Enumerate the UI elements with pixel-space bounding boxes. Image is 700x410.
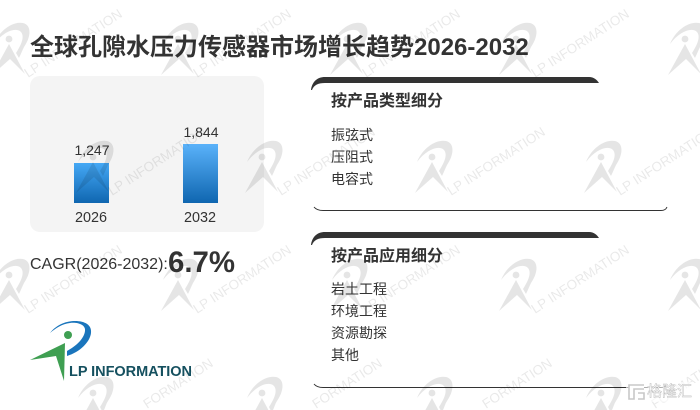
- watermark pattern: LP INFORMATION: [528, 6, 632, 81]
- logo: LP Information: LP INFORMATION: [69, 364, 192, 380]
- list: [331, 127, 373, 187]
- heading: 按产品应用细分: [331, 248, 443, 265]
- watermark pattern: LP INFORMATION: [105, 124, 209, 199]
- heading: 按产品类型细分: [331, 93, 443, 110]
- axis label 2026: 2026: [75, 210, 107, 226]
- list: 资源勘探: [331, 325, 387, 341]
- brand mark: Gelonghui: [626, 382, 694, 402]
- panel: by application: [311, 232, 666, 388]
- icon: G mark: [628, 384, 645, 400]
- watermark pattern: FORMATION: [140, 355, 216, 410]
- watermark pattern: LP INFORMATION: [21, 6, 125, 81]
- bar 2032: [183, 144, 218, 203]
- title: 全球孔隙水压力传感器市场增长趋势2026-2032: [30, 34, 529, 61]
- list: [331, 281, 387, 363]
- watermark pattern: LP INFORMATION: [359, 242, 463, 317]
- axis label 2032: 2032: [184, 210, 216, 226]
- panel frame: [311, 77, 668, 211]
- list: 环境工程: [331, 303, 387, 319]
- value 2026: 1,247: [74, 142, 110, 158]
- list: 压阻式: [331, 149, 373, 165]
- bar 2026: [74, 163, 109, 203]
- watermark pattern: LP INFORMATION: [190, 242, 294, 317]
- panel: market size bar chart: [30, 76, 264, 232]
- list: 其他: [331, 347, 359, 363]
- watermark pattern: LP INFORMATION: [21, 242, 125, 317]
- watermark pattern: LP INFORMATION: [444, 124, 548, 199]
- panel frame: [311, 232, 666, 388]
- watermark pattern: FORMATION: [309, 355, 385, 410]
- value 2032: 1,844: [183, 124, 219, 140]
- watermark pattern: FORMATION: [479, 355, 555, 410]
- list: 振弦式: [331, 127, 373, 143]
- watermark pattern: LP INFORMATION: [190, 6, 294, 81]
- CAGR label: CAGR(2026-2032):: [30, 256, 168, 273]
- CAGR value: 6.7%: [168, 246, 235, 279]
- list: 岩土工程: [331, 281, 387, 297]
- brand name: 格隆汇: [647, 383, 692, 400]
- watermark pattern: LP INFORMATION: [274, 124, 378, 199]
- watermark pattern: LP INFORMATION: [359, 6, 463, 81]
- panel: by product type: [311, 77, 668, 211]
- watermark pattern: LP INFORMATION: [528, 242, 632, 317]
- list: 电容式: [331, 171, 373, 187]
